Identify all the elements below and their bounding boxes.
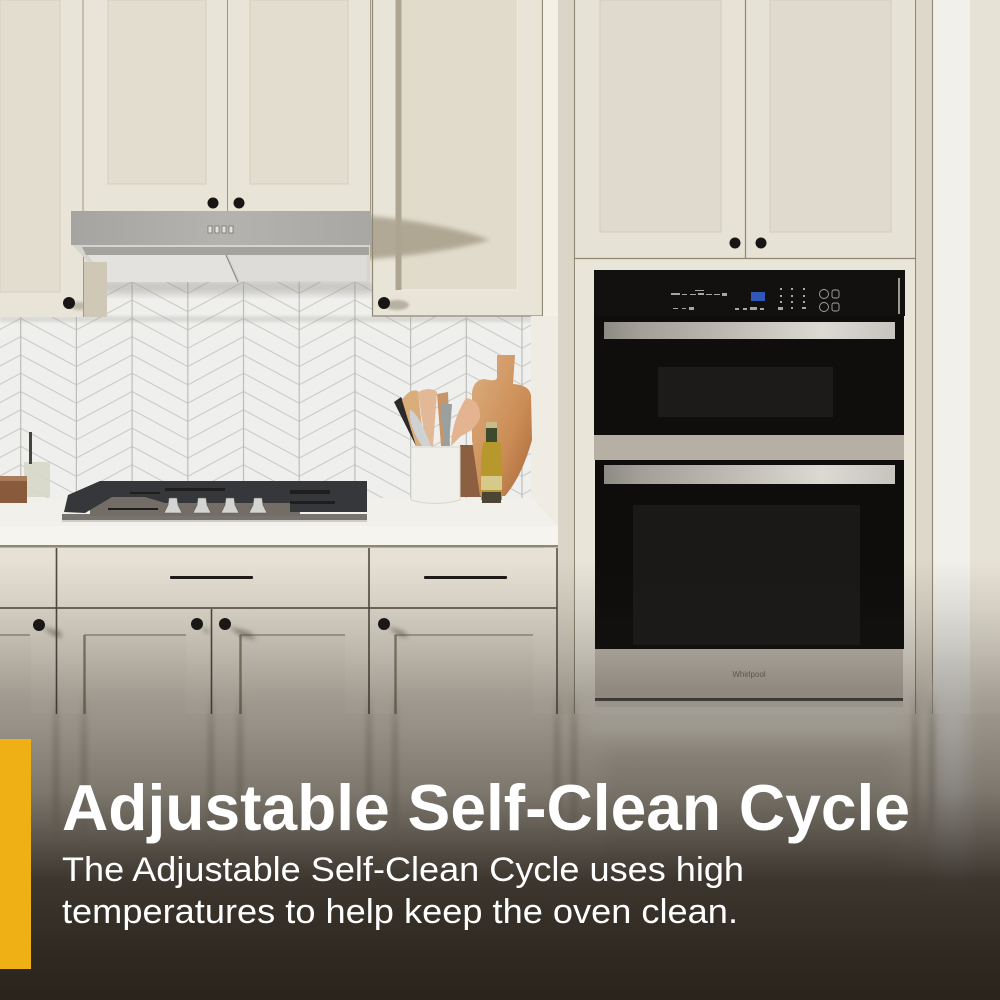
title: Adjustable Self-Clean Cycle xyxy=(62,771,910,844)
description xyxy=(62,851,744,931)
upper cabinet left xyxy=(0,0,88,317)
dark gradient overlay xyxy=(0,560,1000,1000)
tower upper cabinet doors xyxy=(575,0,915,258)
left bottle and bowl xyxy=(0,432,50,503)
description: temperatures to help keep the oven clean. xyxy=(62,893,738,931)
upper cabinet right xyxy=(360,0,543,316)
lower doors xyxy=(0,548,557,725)
marble crock xyxy=(411,447,460,504)
utensils xyxy=(394,389,480,446)
drawers xyxy=(0,548,557,609)
olive oil bottle xyxy=(481,422,502,503)
oven base and logo: Whirlpool xyxy=(732,670,766,679)
range hood xyxy=(71,211,371,317)
backsplash tile xyxy=(0,282,531,498)
blurred lower cabinets xyxy=(0,680,1000,1000)
upper cabinet double doors over hood xyxy=(83,0,370,211)
yellow accent bar xyxy=(0,739,31,969)
cutting board xyxy=(460,355,532,497)
base cabinets xyxy=(0,548,557,725)
lower oven door xyxy=(595,460,904,649)
upper oven door xyxy=(594,316,904,435)
wall oven xyxy=(594,270,905,707)
oven base and logo xyxy=(595,649,903,707)
counter top xyxy=(0,498,558,548)
tower frame and right wall xyxy=(531,0,1000,900)
cooktop xyxy=(62,481,367,522)
description: The Adjustable Self-Clean Cycle uses high xyxy=(62,851,744,889)
oven control panel xyxy=(594,270,905,316)
steel divider xyxy=(594,435,904,460)
